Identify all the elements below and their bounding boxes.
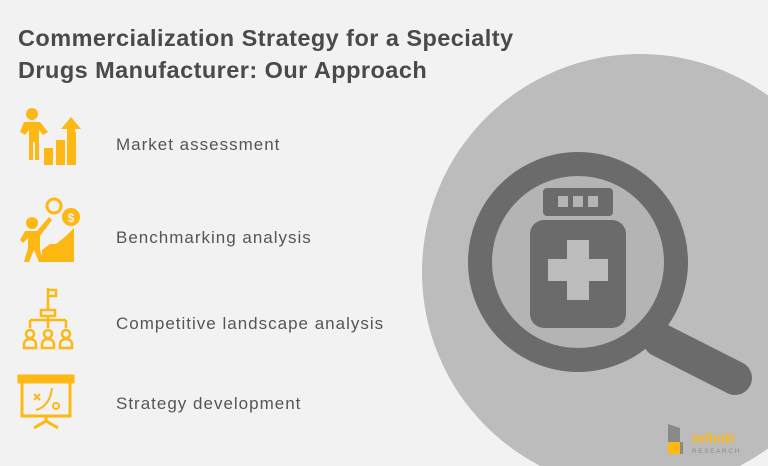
item: market assessment: Market assessment xyxy=(116,135,280,154)
icon: competitive landscape xyxy=(24,288,72,348)
logo xyxy=(668,424,741,455)
icon: market assessment xyxy=(20,108,81,165)
big circle xyxy=(422,54,768,466)
logo: RESEARCH xyxy=(692,448,741,455)
icon: benchmarking xyxy=(20,199,80,262)
title: Commercialization Strategy for a Specialty xyxy=(18,25,514,51)
title xyxy=(18,25,514,83)
item: benchmarking: Benchmarking analysis xyxy=(116,228,312,247)
icon: magnifier xyxy=(480,164,735,378)
item: strategy: Strategy development xyxy=(116,394,301,413)
item: competitive: Competitive landscape analysis xyxy=(116,314,384,333)
icon: benchmarking: $ xyxy=(68,211,75,225)
logo: infiniti xyxy=(692,430,734,446)
title: Drugs Manufacturer: Our Approach xyxy=(18,57,427,83)
icon: strategy xyxy=(19,376,73,428)
